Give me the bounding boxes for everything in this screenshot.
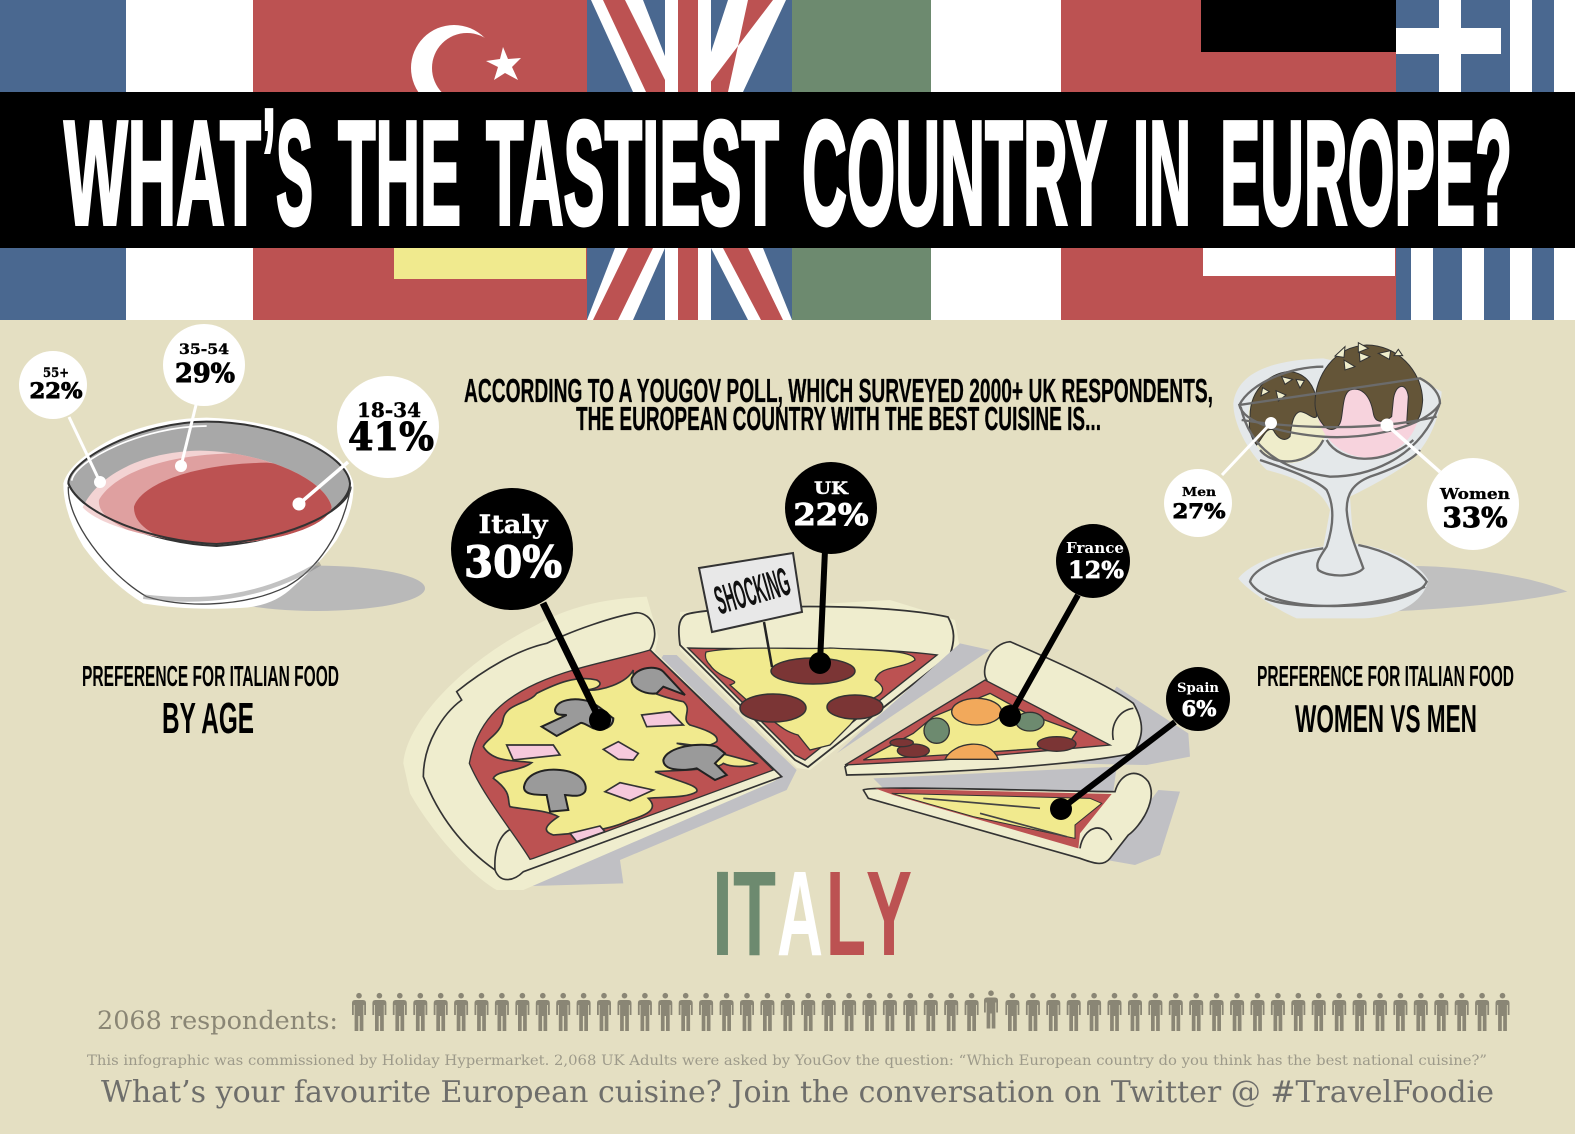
title: COUNTRY (802, 91, 1107, 256)
title: WHAT (64, 91, 261, 256)
callout: UK 22%: UK (814, 479, 849, 499)
panel: soup bowl by age (19, 324, 439, 743)
intro text: THE EUROPEAN COUNTRY WITH THE BEST CUISINE IS... (576, 400, 1101, 437)
callout: 55+: 55+ (43, 366, 69, 381)
callout: 35-54: 35-54 (179, 342, 229, 358)
callout: 18-34: 18-34 (357, 398, 421, 422)
title: S (276, 91, 313, 256)
callout: Italy 30% (451, 488, 611, 731)
callout: 18-34: 41% (348, 414, 434, 459)
callout: France 12% (999, 524, 1130, 727)
title: IN (1133, 91, 1191, 256)
callout: France 12%: 12% (1068, 557, 1124, 584)
heading: ITALY (712, 845, 912, 981)
icon: ice cream sundae (1233, 343, 1567, 618)
source note: This infographic was commissioned by Holiday Hypermarket. 2,068 UK Adults were asked by YouGov the question: “Which European country do you think has the best national cuisine?” (87, 1053, 1487, 1069)
callout: 18-34 (292, 376, 439, 510)
callout: Spain 6%: 6% (1182, 696, 1217, 721)
pizza: France and Spain slices (837, 642, 1190, 865)
heading: by age: BY AGE (162, 694, 254, 743)
flag stripes banner (0, 0, 1575, 320)
panel: ice cream by gender (1164, 343, 1567, 741)
callout: UK 22%: 22% (794, 498, 868, 533)
title: ’ (262, 79, 276, 244)
title (64, 79, 1512, 256)
callout: men: 27% (1172, 499, 1226, 523)
callout: Italy 30%: 30% (464, 538, 562, 588)
callout: women (1380, 418, 1519, 550)
title: THE (338, 91, 461, 256)
callout: men (1164, 417, 1277, 537)
heading: by age: PREFERENCE FOR ITALIAN FOOD (82, 661, 339, 693)
heading: ITALY: Y (866, 845, 912, 981)
heading: ITALY: I (712, 845, 733, 981)
call to action: What’s your favourite European cuisine? Join the conversation on Twitter @ #TravelFoodie (101, 1075, 1494, 1110)
respondents label: 2068 respondents: (97, 1006, 338, 1035)
title: TASTIEST (486, 91, 779, 256)
callout: 55+ (19, 351, 106, 488)
heading: by age (82, 661, 339, 743)
pizza: Italy slice (403, 597, 797, 890)
heading: ITALY: T (733, 845, 776, 981)
callout: 35-54: 29% (175, 359, 235, 389)
icon: soup bowl (63, 418, 425, 611)
callout: UK 22% (785, 462, 877, 674)
heading: ITALY: L (826, 845, 866, 981)
callout: Italy 30%: Italy (478, 510, 549, 539)
intro text (464, 372, 1213, 437)
sign: shocking (699, 553, 802, 667)
heading: ITALY: A (777, 845, 823, 981)
callout: men: Men (1182, 485, 1216, 499)
heading: women vs men (1257, 661, 1514, 741)
callout: women: Women (1439, 485, 1510, 503)
panel: pizza chart: SHOCKING (710, 560, 795, 623)
callout: Spain 6% (1050, 667, 1230, 820)
pictogram: respondents (352, 990, 1510, 1031)
pizza: UK slice (679, 600, 960, 770)
callout: 35-54 (163, 324, 245, 472)
callout: France 12%: France (1066, 539, 1124, 557)
panel: pizza chart (403, 462, 1230, 890)
callout: women: 33% (1442, 503, 1508, 534)
title band (0, 79, 1575, 256)
callout: 55+: 22% (30, 378, 83, 403)
callout: Spain 6%: Spain (1177, 681, 1220, 696)
